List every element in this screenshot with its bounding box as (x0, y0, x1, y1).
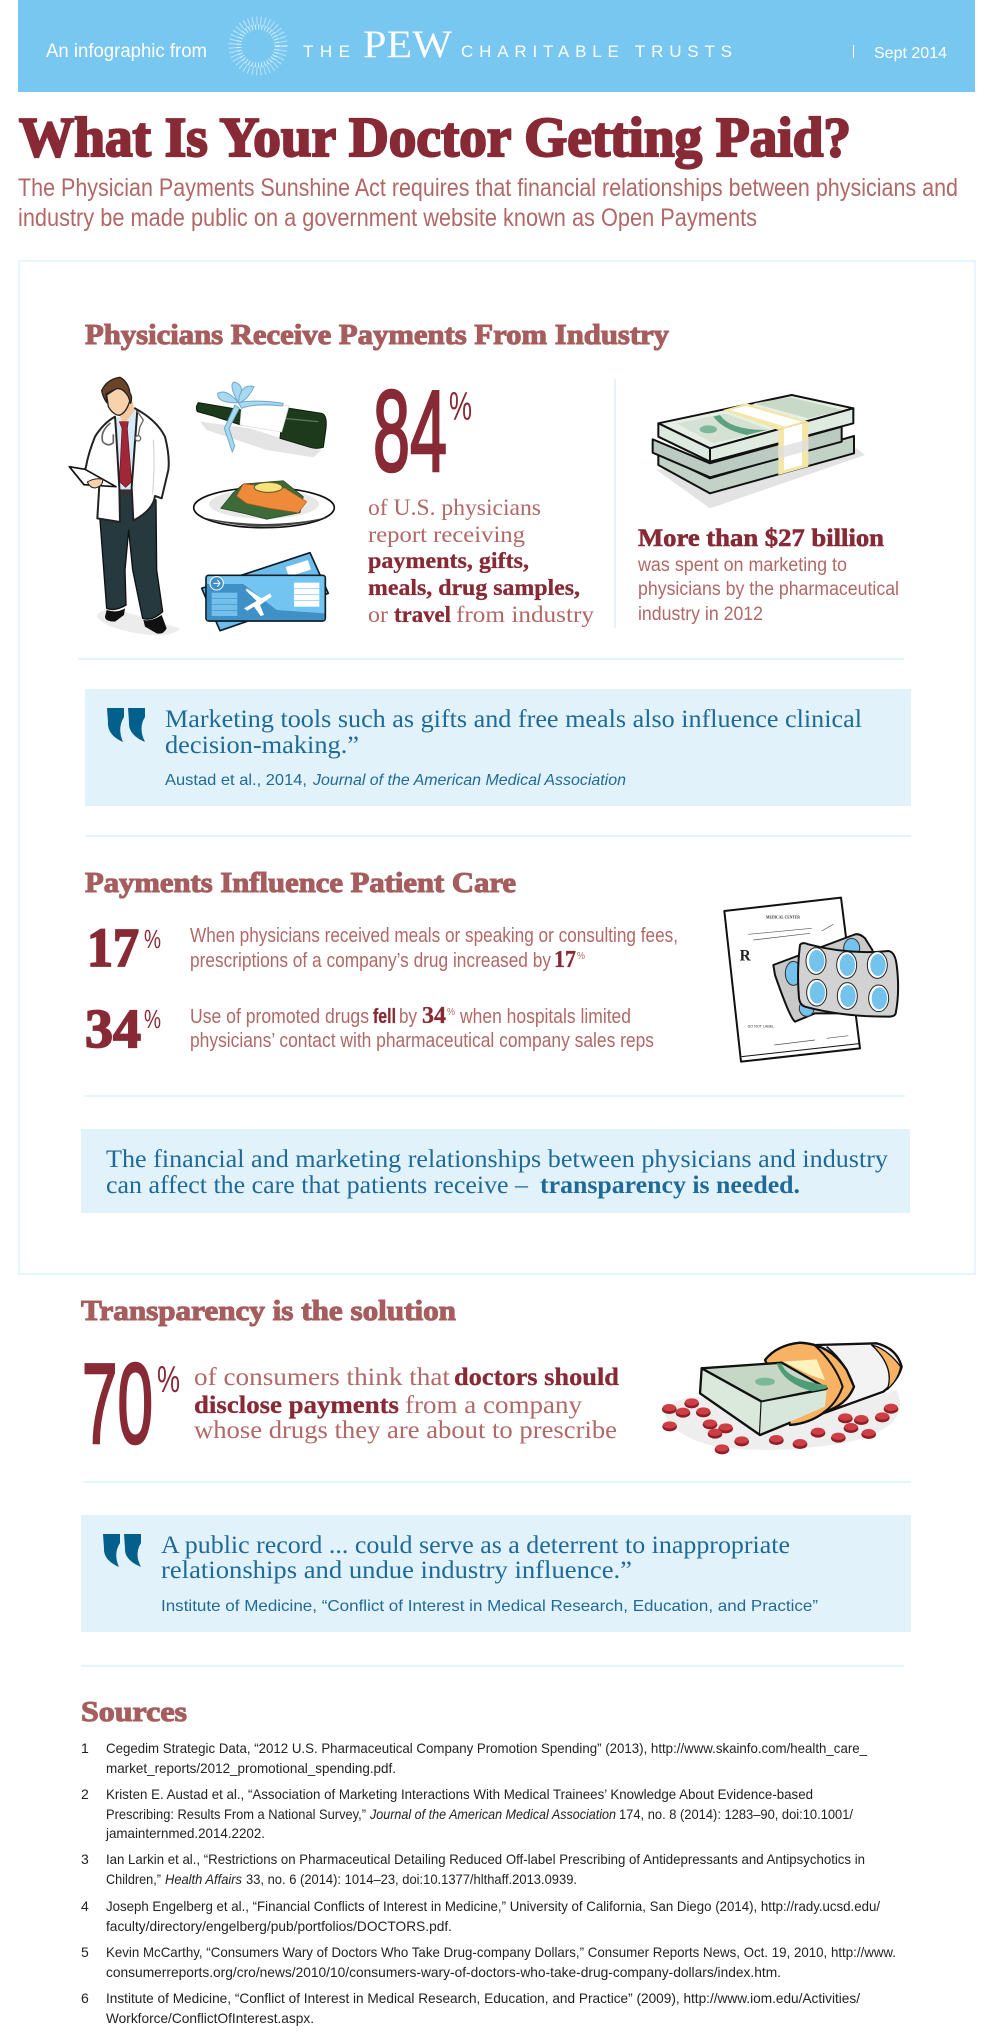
text: 84 percent description: report receiving (368, 522, 526, 547)
quote text: A public record ... could serve as a deterrent to inappropriate (161, 1532, 790, 1559)
text: source list: 174, no. 8 (2014): 1283–90, doi:10.1001/ (619, 1806, 853, 1822)
text: source list: Journal of the American Medical Association (369, 1806, 616, 1822)
header banner (18, 0, 975, 92)
text: source list: Kristen E. Austad et al., “Association of Marketing Interactions With Medical Trainees’ Knowledge About Evidence-based (106, 1786, 813, 1802)
text: 84 percent description (368, 495, 595, 627)
text: 17 percent description: 17 (554, 947, 576, 973)
heading: physicians receive payments: Physicians Receive Payments From Industry (85, 319, 670, 351)
text: 84 percent description: payments, gifts, (368, 548, 529, 573)
header: Pew wordmark: THE (303, 42, 350, 61)
text: 34 percent description: fell (373, 1006, 396, 1028)
callout: public record quote (81, 1515, 911, 1632)
heading: payments influence patient care: Payments Influence Patient Care (85, 867, 516, 899)
icon: doctor (69, 377, 180, 635)
text: 34 percent description: Use of promoted drugs (190, 1006, 369, 1028)
icon: prescription and blister packs: DO NOT LABEL (748, 1025, 774, 1029)
text: source list: 3 (81, 1851, 89, 1867)
header: Pew wordmark: CHARITABLE TRUSTS (461, 42, 732, 61)
stat: 17 percent: % (144, 924, 161, 954)
text: source list: 2 (81, 1786, 89, 1802)
quote text (161, 1532, 790, 1584)
text: 70 percent description: disclose payments (194, 1392, 399, 1419)
pills (662, 1398, 898, 1454)
stat: 17 percent: 17 (87, 917, 139, 978)
text: 34 percent description: physicians’ contact with pharmaceutical company sales reps (190, 1030, 654, 1052)
text: source list: faculty/directory/engelberg/pub/portfolios/DOCTORS.pdf. (106, 1918, 452, 1934)
icon: pill bottle with money and pills (662, 1343, 902, 1454)
icon: Pew sunburst logo (233, 21, 283, 71)
icon: quote mark (107, 708, 145, 742)
text: source list: Kevin McCarthy, “Consumers Wary of Doctors Who Take Drug-company Dollars,” Consumer Reports News, Oct. 19, 2010, http://www. (106, 1944, 896, 1960)
icon: prescription and blister packs: MEDICAL CENTER (766, 914, 801, 919)
title: What Is Your Doctor Getting Paid? (19, 107, 851, 169)
text: 34 percent description (190, 1003, 654, 1052)
text: 34 percent description: 34 (422, 1003, 446, 1029)
quote attribution (165, 772, 626, 789)
icon: prescription and blister packs (724, 898, 898, 1062)
text: source list (81, 1740, 896, 2026)
text: 34 percent description: % (447, 1007, 455, 1018)
text: source list: Institute of Medicine, “Conflict of Interest in Medical Research, Education, and Practice” (2009), http://www.iom.edu/Activities/ (106, 1990, 860, 2006)
text: 27 billion: physicians by the pharmaceutical (638, 579, 899, 600)
callout: marketing tools quote (85, 689, 911, 806)
quote text: decision-making.” (165, 732, 359, 759)
text: 70 percent description: of consumers think that (194, 1364, 450, 1391)
text: 84 percent description: or (368, 602, 388, 627)
text: source list: 1 (81, 1740, 89, 1756)
text: source list: Cegedim Strategic Data, “2012 U.S. Pharmaceutical Company Promotion Spending” (2013), http://www.skainfo.com/health_care_ (106, 1740, 867, 1756)
text: source list: Ian Larkin et al., “Restrictions on Pharmaceutical Detailing Reduced Off-label Prescribing of Antidepressants and Antipsychotics in (106, 1851, 865, 1867)
text: source list: Children,” (106, 1871, 161, 1887)
quote text (165, 706, 862, 759)
text: source list: market_reports/2012_promotional_spending.pdf. (106, 1760, 396, 1776)
text: source list: Joseph Engelberg et al., “Financial Conflicts of Interest in Medicine,” University of California, San Diego (2014), http://rady.ucsd.edu/ (106, 1898, 880, 1914)
subtitle (18, 174, 958, 232)
icon: stacks of money (653, 395, 865, 508)
text: 17 percent description: prescriptions of a company’s drug increased by (190, 950, 551, 972)
text: source list: 4 (81, 1898, 89, 1914)
header: Pew wordmark (303, 23, 732, 66)
text: source list: consumerreports.org/cro/news/2010/10/consumers-wary-of-doctors-who-take-drug-company-dollars/index.htm. (106, 1964, 781, 1980)
header: date: Sept 2014 (874, 45, 947, 62)
text: source list: Prescribing: Results From a National Survey,” (106, 1806, 366, 1822)
text: 70 percent description: whose drugs they are about to prescribe (194, 1417, 617, 1444)
icon: quote mark (103, 1534, 141, 1567)
quote attribution: Institute of Medicine, “Conflict of Interest in Medical Research, Education, and Practice” (161, 1598, 818, 1615)
heading: sources: Sources (81, 1696, 187, 1728)
heading: transparency is the solution: Transparency is the solution (81, 1295, 456, 1327)
callout: transparency is needed: can affect the care that patients receive – (106, 1172, 529, 1199)
quote attribution: Austad et al., 2014, (165, 772, 307, 789)
text: source list: Health Affairs (165, 1871, 242, 1887)
text: 84 percent description: meals, drug samples, (368, 575, 580, 600)
text: 70 percent description (194, 1364, 619, 1444)
text: source list: jamainternmed.2014.2202. (105, 1825, 265, 1841)
panel: physicians and payments (19, 261, 975, 1274)
text: 34 percent description: by (399, 1006, 417, 1028)
callout: transparency is needed (81, 1129, 910, 1213)
text: source list: Workforce/ConflictOfInterest.aspx. (106, 2010, 314, 2026)
text: source list: 33, no. 6 (2014): 1014–23, doi:10.1377/hlthaff.2013.0939. (246, 1871, 577, 1887)
text: 84 percent description: from industry (456, 602, 595, 627)
stat: 34 percent: 34 (85, 998, 141, 1059)
stat: 34 percent: % (144, 1004, 161, 1034)
text: 17 percent description: When physicians received meals or speaking or consulting fees, (190, 925, 678, 947)
text: 17 percent description (190, 925, 678, 973)
text: source list: 5 (81, 1944, 89, 1960)
header: intro text: An infographic from (46, 41, 207, 62)
quote attribution: Journal of the American Medical Association (312, 772, 626, 789)
text: 70 percent description: from a company (405, 1392, 583, 1419)
subtitle: industry be made public on a government website known as Open Payments (18, 204, 757, 232)
stat: 70 percent: 70 (82, 1341, 153, 1468)
icon: prescription and blister packs: R (740, 947, 752, 964)
quote text: Marketing tools such as gifts and free meals also influence clinical (165, 706, 862, 733)
stat: 84 percent: % (449, 385, 472, 429)
stat: 70 percent: % (157, 1359, 180, 1400)
icon: wine bottle gift (196, 382, 326, 457)
text: 27 billion: industry in 2012 (638, 604, 763, 625)
header: Pew wordmark: PEW (363, 23, 452, 66)
text: 27 billion: More than $27 billion (638, 525, 884, 552)
text: 27 billion (637, 525, 899, 625)
text: 84 percent description: travel (394, 602, 451, 627)
text: 17 percent description: % (577, 951, 585, 962)
text: source list: 6 (81, 1990, 89, 2006)
icon: salmon dinner plate (194, 481, 334, 528)
quote text: relationships and undue industry influence.” (161, 1557, 632, 1584)
text: 27 billion: was spent on marketing to (637, 555, 847, 576)
stat: 84 percent: 84 (373, 366, 447, 496)
icon: airline tickets (202, 553, 328, 631)
callout: transparency is needed: transparency is needed. (540, 1172, 800, 1199)
text: 34 percent description: when hospitals limited (459, 1006, 631, 1028)
text: 84 percent description: of U.S. physicians (368, 495, 541, 520)
text: 70 percent description: doctors should (454, 1364, 619, 1391)
callout: transparency is needed: The financial and marketing relationships between physicians and industry (106, 1146, 889, 1173)
